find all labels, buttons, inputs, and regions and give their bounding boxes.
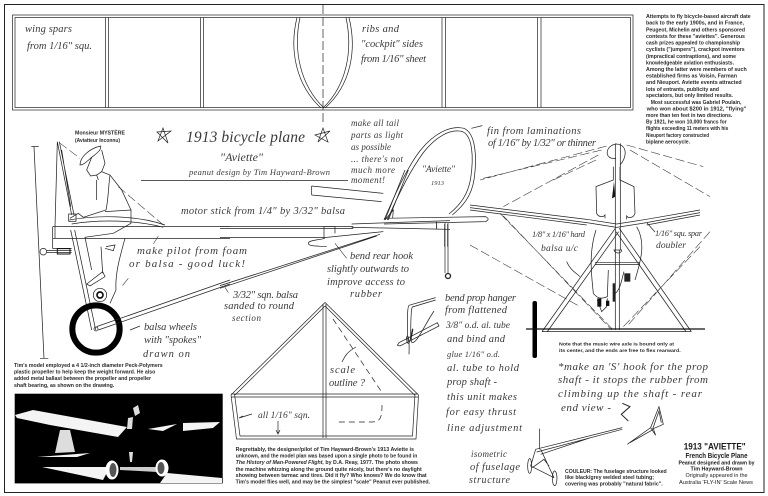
note: S hook: [558, 361, 708, 414]
body text: history of aviettes: cyclists ("jumpers"), crackpot inventors: [646, 47, 745, 53]
caption: regrettably: Regrettably, the designer/pilot of Tim Hayward-Brown's 1913 Aviette is: [236, 447, 414, 453]
note: S hook: shaft - it stops the rubber from: [558, 374, 708, 386]
plan title: peanut design by Tim Hayward-Brown: [188, 167, 330, 177]
side view: pilot and bicycle front: [31, 142, 230, 358]
note: bend prop hanger: from flattened: [445, 305, 508, 316]
body text: history of aviettes: flights exceeding 11 meters with his: [646, 126, 728, 132]
note: balsa wheels: [143, 322, 202, 360]
note: make all tail parts light: make all tail: [351, 118, 399, 128]
note: boom section: 3/32" sqn. balsa: [232, 290, 298, 301]
note: bend rear hook: bend rear hook: [350, 251, 413, 262]
note: bend prop hanger: 3/8" o.d. al. tube: [445, 321, 510, 331]
wing plan panel: [12, 5, 633, 122]
note: isometric of fuselage: of fuselage: [470, 462, 520, 473]
body text: history of aviettes: Attempts to fly bicycle-based aircraft date: [646, 14, 751, 20]
label: Monsieur Mystere: (Aviatteur Inconnu): [75, 138, 120, 144]
title block: 1913 Aviette: Originally appeared in the: [686, 473, 748, 479]
note: fin laminations: fin from laminations: [487, 126, 581, 137]
note: scale outline: [329, 365, 366, 389]
note: wing spars: from 1/16" squ.: [27, 41, 92, 52]
note: bend prop hanger: bend prop hanger: [445, 293, 517, 304]
note: make all tail parts light: [350, 118, 403, 185]
note: isometric of fuselage: isometric: [471, 449, 507, 459]
note: balsa wheels: balsa wheels: [144, 322, 197, 333]
note: make pilot: make pilot from foam: [137, 245, 247, 257]
body text: history of aviettes: who won about $200 in 1912, "flying": [646, 106, 747, 112]
body text: history of aviettes: Most successful was Gabriel Poulain,: [651, 100, 742, 106]
body text: history of aviettes: Among the latter were members of such: [646, 67, 747, 73]
note: spar doubler: doubler: [656, 241, 686, 251]
note: fin laminations: of 1/16" by 1/32" or thinner: [488, 138, 597, 149]
note: music wire axle: [559, 342, 681, 354]
note: bend rear hook: [327, 251, 413, 300]
label: Monsieur Mystere: Monsieur MYSTÈRE: [75, 128, 126, 136]
note: all 1/16 square: all 1/16" sqn.: [258, 411, 310, 421]
rear hook drop wire: [445, 223, 450, 278]
note: scale outline: outline ?: [329, 378, 366, 389]
note: balsa wheels: drawn on: [143, 349, 190, 360]
title underline: [141, 180, 348, 182]
ground line: [526, 328, 705, 330]
plan title: 1913 bicycle plane: [186, 129, 305, 146]
note: bend prop hanger: for easy thrust: [446, 407, 517, 418]
note: boom section: sanded to round: [224, 301, 295, 312]
note: hard balsa undercarriage: balsa u/c: [541, 244, 579, 254]
leader: wheels: [130, 326, 140, 330]
note: bend prop hanger: prop shaft -: [446, 377, 498, 388]
note: make all tail parts light: parts as light: [350, 130, 403, 140]
note: bend prop hanger: and bind and: [447, 334, 506, 345]
note: spar doubler: 1/16" squ. spar: [655, 228, 703, 238]
body text: history of aviettes: back to the early 1900s, and in France,: [646, 21, 745, 27]
note: ribs and cockpit sides: ribs and: [362, 24, 400, 35]
plan title: [186, 129, 330, 177]
body text: history of aviettes: biplane aerocycle.: [646, 140, 691, 146]
plan title: "Aviette": [220, 150, 264, 164]
body text: history of aviettes: established firms as Voisin, Farman: [646, 74, 737, 80]
title block: 1913 Aviette: 1913 "AVIETTE": [684, 442, 746, 452]
propeller hanger sketch: [397, 298, 439, 354]
body text: history of aviettes: knowledgeable aviation enthusiasts.: [646, 60, 735, 66]
body text: history of aviettes: lots of entrants, publicity and: [646, 87, 719, 93]
note: make all tail parts light: much more: [351, 165, 395, 175]
note: bend rear hook: rubber: [350, 289, 383, 300]
fin lettering: 1913: [431, 180, 445, 187]
note: spar doubler: [655, 228, 703, 251]
body text: history of aviettes: (impractical contraptions), and some: [646, 54, 736, 60]
note: boom section: [224, 290, 298, 323]
label: Monsieur Mystere: [75, 128, 126, 144]
caption: Tim's model: shaft bearing, as shown on the drawing.: [14, 383, 115, 389]
note: balsa wheels: with "spokes": [144, 335, 202, 346]
leader: spar doubler: [647, 223, 655, 232]
fin lettering: [422, 165, 456, 187]
caption: couleur: covering was probably "natural fabric".: [565, 482, 663, 488]
front view: pilot, wing and undercarriage: [470, 143, 710, 332]
note: scale outline: scale: [330, 365, 355, 376]
body text: history of aviettes: more than ten feet in two directions.: [646, 113, 733, 119]
body text: history of aviettes: Peugeot, Michelin and others sponsored: [646, 27, 745, 33]
title block: 1913 Aviette: [678, 442, 755, 486]
S hook sketches: [621, 403, 663, 444]
title block: 1913 Aviette: French Bicycle Plane: [686, 453, 748, 460]
note: isometric of fuselage: structure: [469, 475, 511, 486]
fin lettering: "Aviette": [422, 165, 456, 175]
body text: history of aviettes: contests for these "aviettes". Generous: [646, 34, 745, 40]
body text: history of aviettes: cash prizes appealed to championship: [646, 40, 740, 46]
fuselage plan view: [231, 302, 418, 439]
caption: Tim's model: [14, 363, 163, 389]
caption: regrettably: the machine whizzing along the ground quite nicely, but there's no daylight: [236, 467, 422, 473]
title block: 1913 Aviette: Australia 'FLY-IN' Scale News: [679, 480, 754, 486]
note: ribs and cockpit sides: from 1/16" sheet: [361, 54, 427, 65]
note: S hook: *make an 'S' hook for the prop: [558, 361, 708, 373]
note: make all tail parts light: as possible: [351, 142, 391, 152]
caption: couleur: COULEUR: The fuselage structure looked: [565, 469, 667, 475]
note: fin laminations: [487, 126, 597, 149]
note: ribs and cockpit sides: "cockpit" sides: [361, 39, 423, 50]
caption: regrettably: The History of Man-Powered Flight, by D.A. Reay, 1977. The photo shows: [236, 460, 418, 466]
note: S hook: end view -: [561, 402, 611, 414]
caption: Tim's model: Tim's model employed a 4 1/2-inch diameter Peck-Polymers: [14, 363, 163, 369]
body text: history of aviettes: [646, 14, 751, 146]
fin outline: [384, 126, 488, 247]
note: ribs and cockpit sides: [361, 24, 427, 65]
title block: 1913 Aviette: Tim Hayward-Brown: [690, 466, 742, 472]
caption: regrettably: unknown, and the model plan was based upon a single photo to be found in: [236, 454, 417, 460]
note: bend rear hook: slightly outwards to: [327, 264, 409, 275]
caption: regrettably: [236, 447, 431, 486]
note: S hook: climbing up the shaft - rear: [558, 388, 703, 400]
side view: rear fuselage and fin: [220, 170, 450, 293]
note: hard balsa undercarriage: [532, 229, 586, 254]
note: boom section: section: [232, 313, 262, 323]
body text: history of aviettes: Nieuport factory constructed: [646, 133, 709, 139]
note: bend prop hanger: [445, 293, 523, 434]
note: hard balsa undercarriage: 1/8" x 1/16" hard: [532, 229, 586, 239]
note: make all tail parts light: ... there's not: [351, 154, 403, 164]
note: bend prop hanger: glue 1/16" o.d.: [447, 349, 500, 359]
propeller front view: [532, 301, 537, 358]
caption: couleur: like black/grey welded steel tubing;: [565, 475, 654, 481]
note: make pilot: or balsa - good luck!: [129, 258, 245, 270]
photo: Aviette in motion: [15, 394, 223, 483]
note: bend rear hook: improve access to: [327, 277, 405, 288]
body text: history of aviettes: spectators, but only limited results.: [646, 93, 734, 99]
note: motor stick: motor stick from 1/4" by 3/32" balsa: [181, 206, 345, 217]
note: bend prop hanger: al. tube to hold: [447, 363, 520, 374]
note: wing spars: wing spars: [25, 24, 72, 35]
isometric fuselage sketch: [528, 428, 622, 486]
note: music wire axle: Note that the music wire axle is bound only at: [559, 342, 674, 348]
note: wing spars: [25, 24, 92, 52]
body text: history of aviettes: and Nieuport. Aviette events attracted: [646, 80, 742, 86]
note: bend prop hanger: this unit makes: [447, 392, 517, 403]
icon: left star: [157, 128, 171, 143]
note: bend prop hanger: line adjustment: [447, 423, 523, 434]
note: make all tail parts light: moment!: [351, 175, 385, 185]
caption: couleur: [565, 469, 667, 488]
note: music wire axle: its center, and the ends are free to flex rearward.: [559, 348, 681, 354]
note: make pilot: [129, 245, 247, 270]
title block: 1913 Aviette: Peanut designed and drawn by: [678, 460, 755, 466]
icon: right star: [315, 128, 330, 142]
caption: Tim's model: plastic propeller to help keep the weight forward. He also: [14, 370, 155, 376]
body text: history of aviettes: By 1921, he won 10,000 francs for: [646, 120, 727, 126]
note: isometric of fuselage: [469, 449, 520, 486]
caption: regrettably: Tim's model flies well, and may be the simplest "scale" Peanut ever published.: [236, 480, 431, 486]
caption: Tim's model: added metal ballast between the propeller and propeller: [14, 376, 151, 382]
caption: regrettably: showing between tarmac and tires. Did it fly? Who knows? We do know that: [236, 473, 427, 479]
